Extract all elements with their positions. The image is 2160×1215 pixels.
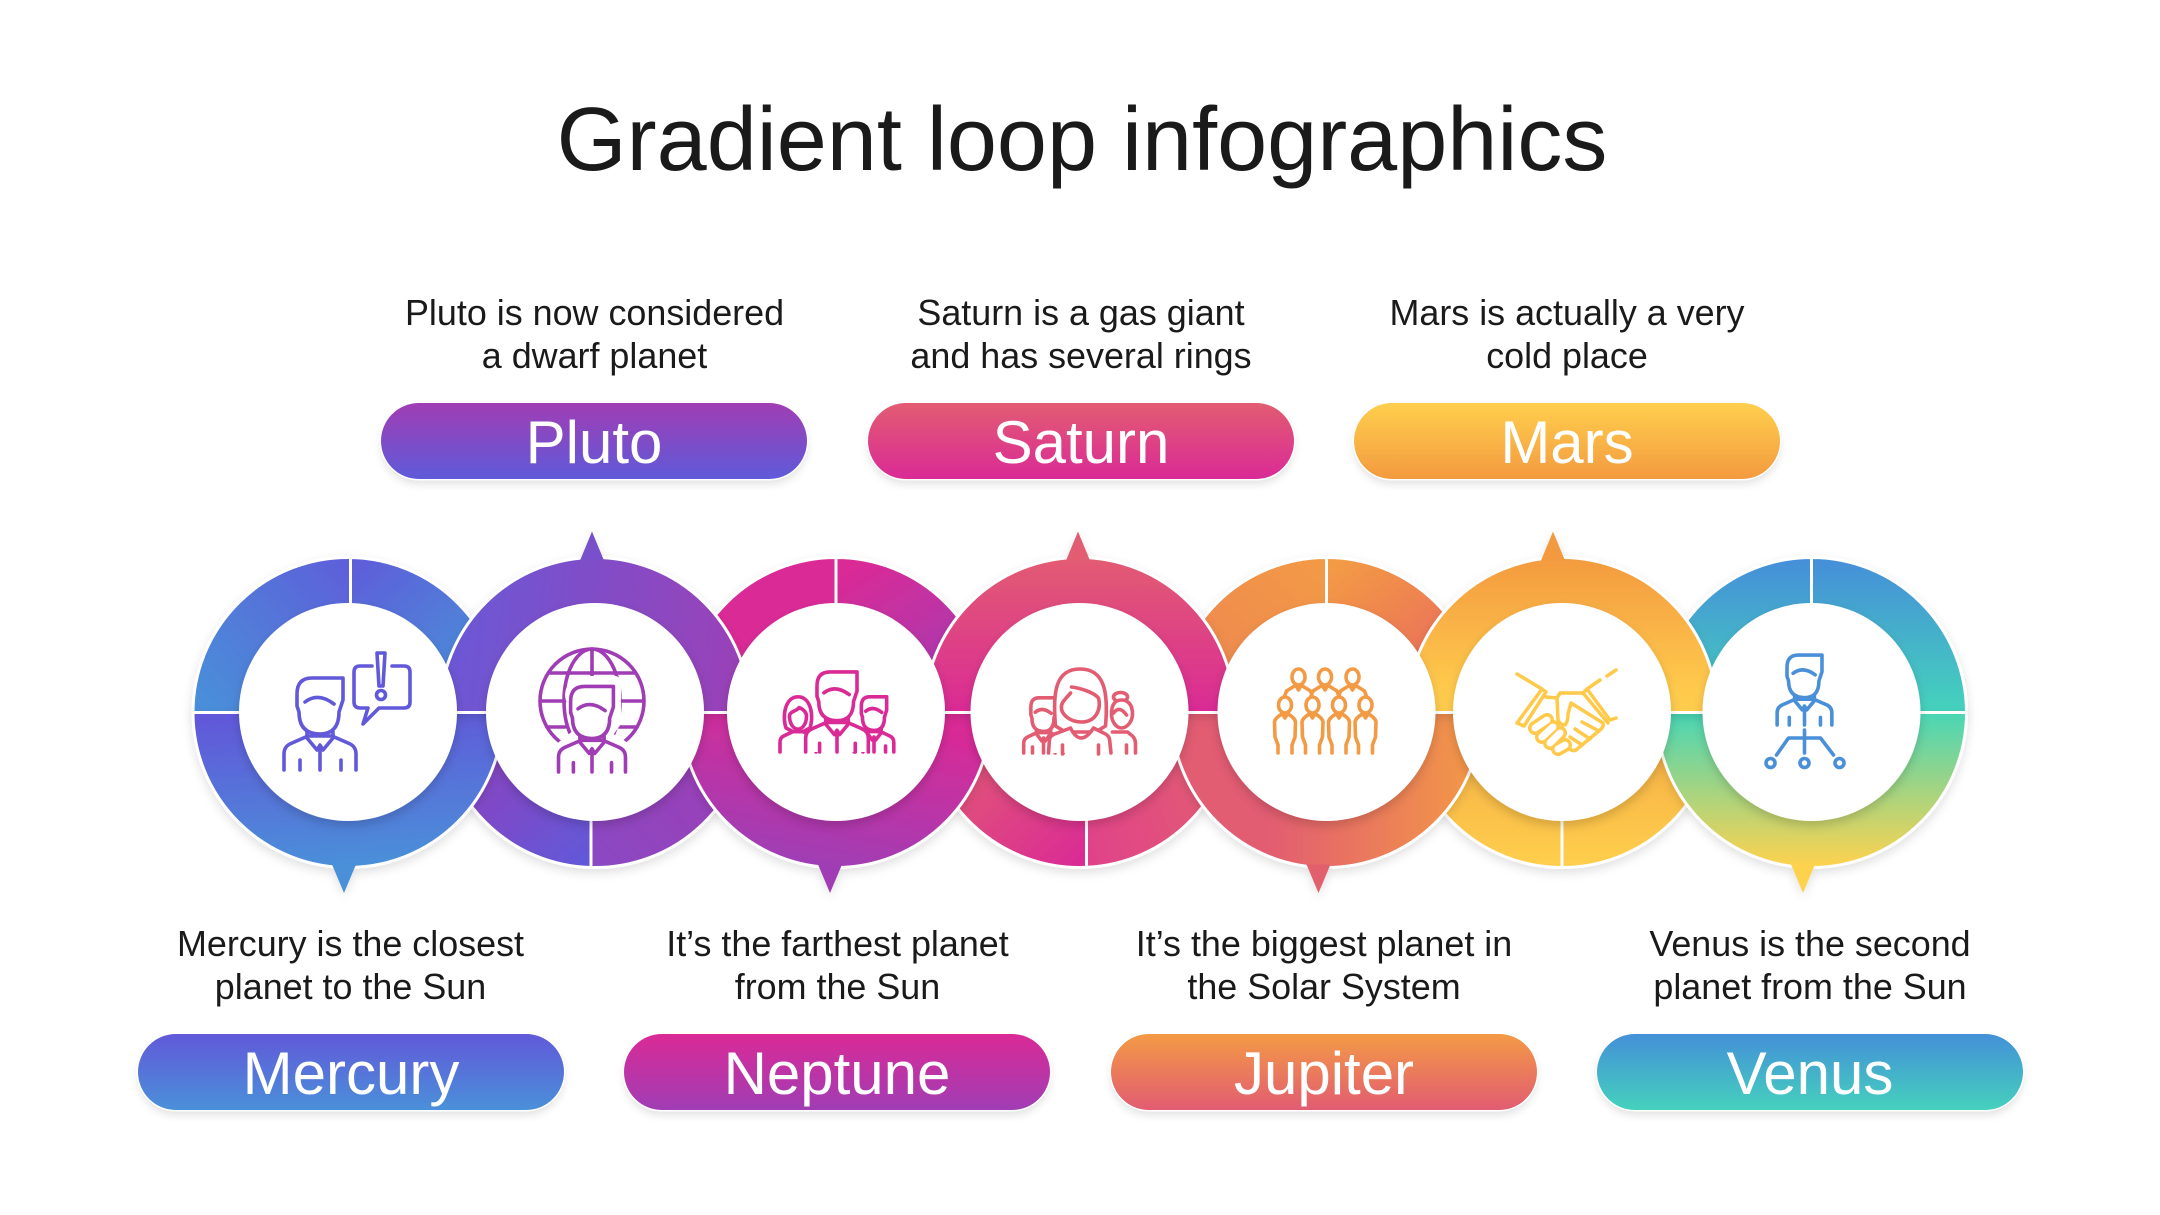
label: Venus: Venus [1727,1040,1893,1107]
text: Mercury description: Mercury is the closest [177,924,524,964]
text: Saturn description: and has several rings [910,336,1252,376]
ring: Venus upper half [1656,558,1966,712]
title: Gradient loop infographics [557,90,1607,190]
label: Mercury [138,1034,564,1110]
ring: Pluto lower half [440,712,750,868]
icon: man in front of globe [540,649,644,772]
text: Jupiter description [1136,924,1512,1007]
label: Jupiter [1111,1034,1537,1110]
text: Mars description: cold place [1486,336,1648,376]
text: Venus description [1649,924,1971,1007]
icon: man with network nodes [1766,655,1844,768]
label: Mars [1354,403,1780,479]
white disc: Venus [1702,603,1920,821]
text: Pluto description: Pluto is now considered [405,293,784,333]
label: Neptune: Neptune [724,1040,950,1107]
label: Venus [1597,1034,2023,1110]
ring: Mars lower half [1407,712,1717,868]
text: Mercury description: planet to the Sun [215,967,486,1007]
white disc: Jupiter [1218,603,1436,821]
text: Jupiter description: It’s the biggest planet in [1136,924,1512,964]
label: Mercury: Mercury [243,1040,459,1107]
icon: woman with team [1024,669,1136,754]
ring: Pluto upper half with pointer [440,532,750,712]
white disc: Mars [1453,603,1671,821]
white disc: Pluto [486,603,704,821]
text: Neptune description: from the Sun [735,967,940,1007]
text: Mars description [1389,293,1745,376]
white disc: Saturn [970,603,1188,821]
icon: family group [780,672,894,752]
text: Pluto description: a dwarf planet [482,336,707,376]
text: Venus description: Venus is the second [1649,924,1971,964]
text: Neptune description [666,924,1009,1007]
text: Jupiter description: the Solar System [1187,967,1461,1007]
text: Saturn description [910,293,1252,376]
text: Pluto description [405,293,784,376]
ring: Saturn upper half with pointer [924,532,1234,712]
label: Mars: Mars [1500,409,1634,476]
ring: Venus lower half with pointer [1656,712,1966,893]
label: Neptune [624,1034,1050,1110]
icon: man with alert speech bubble [284,653,410,770]
white disc: Mercury [239,603,457,821]
ring: Mars upper half with pointer [1407,532,1717,712]
ring: Saturn lower half [924,712,1234,867]
ring: Jupiter upper half [1172,558,1482,712]
ring: Neptune lower half with pointer [681,712,991,893]
text: Mercury description [177,924,524,1007]
text: Neptune description: It’s the farthest planet [666,924,1009,964]
label: Saturn [868,403,1294,479]
label: Pluto [381,403,807,479]
label: Saturn: Saturn [993,409,1169,476]
white disc: Neptune [727,603,945,821]
ring: Mercury upper half [193,557,503,712]
ring: Neptune upper half [681,558,991,712]
ring: Mercury lower half with pointer [193,712,503,893]
ring: Jupiter lower half with pointer [1172,712,1482,893]
icon: crowd of people [1274,669,1376,753]
text: Venus description: planet from the Sun [1653,967,1967,1007]
text: Mars description: Mars is actually a very [1389,293,1745,333]
text: Saturn description: Saturn is a gas giant [917,293,1245,333]
label: Jupiter: Jupiter [1234,1040,1414,1107]
label: Pluto: Pluto [526,409,662,476]
icon: handshake [1517,670,1616,751]
